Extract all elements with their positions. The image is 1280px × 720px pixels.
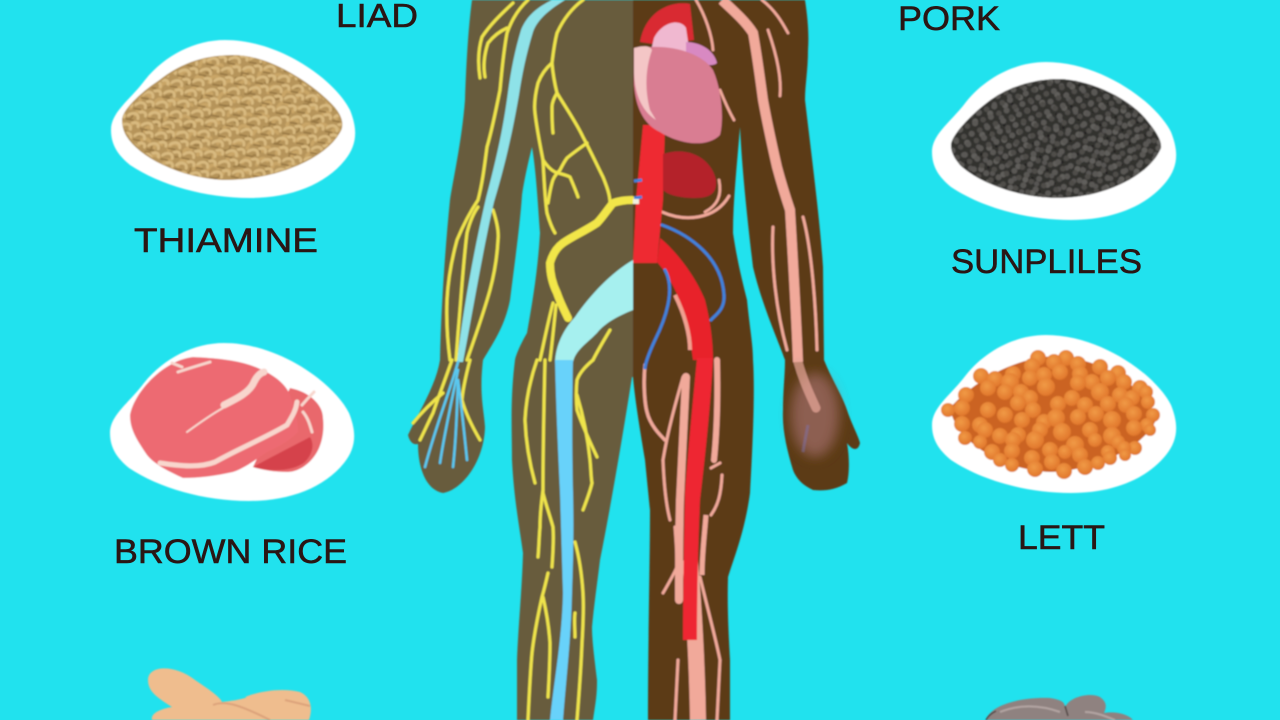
bowl [932,62,1176,220]
right hand: bruised tint [791,373,839,457]
right half: heart [634,3,722,143]
lentils [941,350,1160,479]
grains [122,55,342,180]
label: lett: LETT [1018,519,1105,557]
left leg: blue vessel [550,360,573,720]
panel: seeds bottom right [986,695,1133,720]
right half: aorta and arteries [633,125,724,640]
left hand: blue nerve fan [425,362,467,467]
panel: meat food left [110,343,354,501]
left half: thick yellow nerve [550,200,632,318]
label: supplies: SUNPLILES [951,243,1142,281]
bowl [110,343,354,501]
panel: grain food top left [111,40,355,198]
panel: lentils right [932,335,1176,493]
panel: human body anatomy [408,0,860,720]
left half: pale blue hip band [555,260,633,362]
right half: salmon arm and leg vessels [644,0,817,720]
bowl [932,335,1176,493]
panel: ginger-like food bottom left [148,668,311,720]
left half: pale blue arm vessel [457,0,565,362]
body right half silhouette [633,0,860,720]
panel: black seeds top right [932,62,1176,220]
label: thiamine: THIAMINE [134,222,318,260]
bowl [111,40,355,198]
body left half silhouette [408,0,634,720]
meat front slice [130,357,298,478]
label: pork: PORK [898,0,1000,38]
right half: spleen [663,151,716,198]
left half: yellow nerves [413,0,610,720]
meat marbling [160,362,314,466]
seeds [951,79,1161,198]
meat back slice [253,388,323,472]
center seam detail [633,199,639,204]
label: brown rice: BROWN RICE [114,533,347,571]
